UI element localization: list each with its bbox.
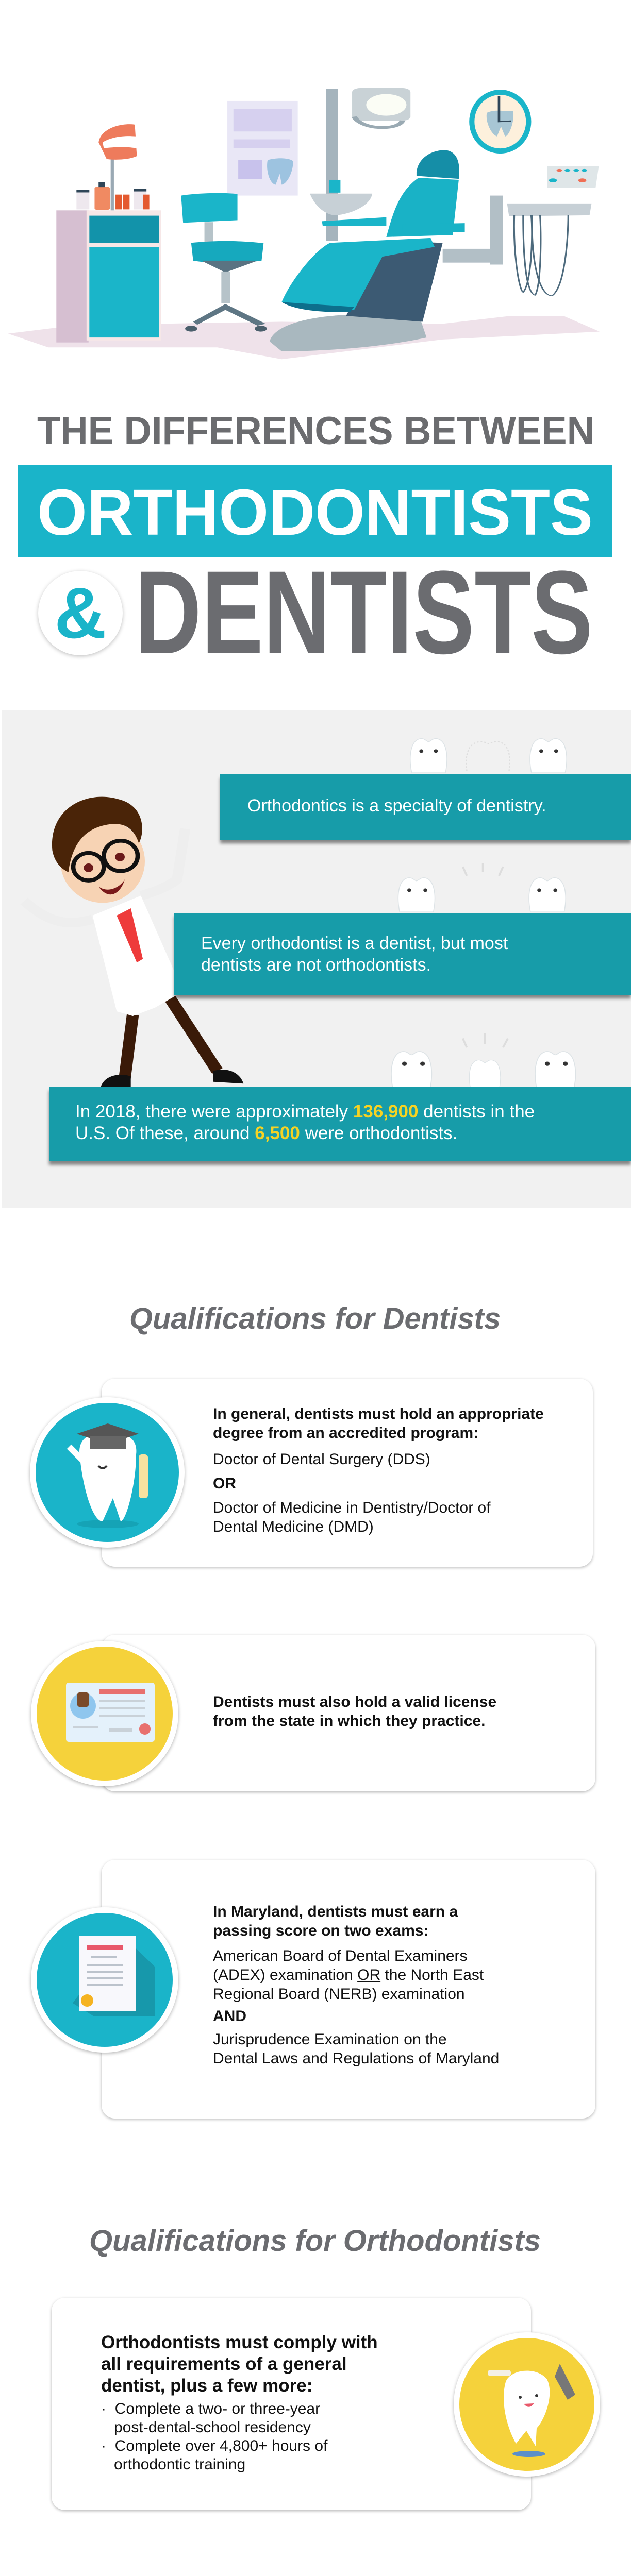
text: maryland exams: (ADEX) examination OR the North East bbox=[213, 1967, 484, 1984]
card: license bbox=[102, 1635, 595, 1791]
stat box: specialty: Orthodontics is a specialty of dentistry. bbox=[247, 796, 546, 816]
text: orthodontist requirements: all requirements of a general bbox=[101, 2354, 347, 2374]
text: orthodontist requirements: dentist, plus a few more: bbox=[101, 2376, 312, 2396]
text: maryland exams: In Maryland, dentists must earn a bbox=[213, 1903, 458, 1920]
title banner: orthodontists: ORTHODONTISTS bbox=[37, 476, 593, 549]
text: degree requirements: In general, dentists must hold an appropriate bbox=[213, 1405, 544, 1422]
text: orthodontist requirements: · Complete a two- or three-year bbox=[101, 2400, 320, 2417]
stat box: every orthodontist: dentists are not orthodontists. bbox=[201, 955, 431, 975]
heading: qualifications for orthodontists: Qualifications for Orthodontists bbox=[89, 2224, 541, 2258]
text: maryland exams: AND bbox=[213, 2008, 246, 2025]
text: degree requirements: Doctor of Dental Surgery (DDS) bbox=[213, 1451, 430, 1468]
stat box: every orthodontist bbox=[174, 913, 631, 995]
text: orthodontist requirements: post-dental-school residency bbox=[114, 2419, 311, 2436]
text: license bbox=[213, 1693, 496, 1730]
text: degree requirements: Doctor of Medicine in Dentistry/Doctor of bbox=[213, 1499, 491, 1516]
icon: graduate tooth bbox=[30, 1397, 185, 1548]
illustration: dental office bbox=[8, 88, 599, 360]
text: license: Dentists must also hold a valid license bbox=[213, 1693, 496, 1710]
icon: license card bbox=[31, 1641, 178, 1786]
text: maryland exams: passing score on two exams: bbox=[213, 1922, 428, 1939]
stat box: every orthodontist: Every orthodontist is a dentist, but most bbox=[201, 934, 508, 953]
text: maryland exams: Regional Board (NERB) examination bbox=[213, 1986, 465, 2003]
icon: certificate bbox=[31, 1907, 178, 2053]
text: degree requirements: degree from an accredited program: bbox=[213, 1425, 478, 1442]
text: orthodontist requirements bbox=[101, 2332, 378, 2473]
text: maryland exams: Dental Laws and Regulations of Maryland bbox=[213, 2050, 499, 2067]
text: maryland exams: Jurisprudence Examination on the bbox=[213, 2031, 447, 2048]
icon: jumping graduate tooth bbox=[454, 2332, 600, 2477]
text: orthodontist requirements: · Complete over 4,800+ hours of bbox=[101, 2437, 327, 2454]
card: degree bbox=[102, 1379, 593, 1567]
stat box: 2018 numbers: U.S. Of these, around 6,500 were orthodontists. bbox=[75, 1123, 457, 1143]
text: degree requirements: Dental Medicine (DMD) bbox=[213, 1518, 374, 1535]
text: degree requirements bbox=[213, 1405, 544, 1535]
card: orthodontist requirements bbox=[52, 2298, 531, 2510]
heading: qualifications for dentists: Qualifications for Dentists bbox=[129, 1302, 501, 1335]
stat box: 2018 numbers bbox=[49, 1087, 631, 1161]
text: license: from the state in which they practice. bbox=[213, 1713, 485, 1730]
illustration: waving doctor and peeking teeth bbox=[52, 738, 576, 1087]
text: degree requirements: OR bbox=[213, 1475, 236, 1492]
text: orthodontist requirements: Orthodontists must comply with bbox=[101, 2332, 378, 2352]
stat box: specialty bbox=[220, 774, 631, 840]
text: orthodontist requirements: orthodontic training bbox=[114, 2456, 245, 2473]
text: maryland exams: American Board of Dental Examiners bbox=[213, 1947, 468, 1964]
card: maryland exams bbox=[102, 1860, 595, 2119]
icon: ampersand circle: & bbox=[54, 572, 107, 653]
text: maryland exams bbox=[213, 1903, 499, 2067]
icon: ampersand circle bbox=[38, 571, 123, 655]
panel: key facts bbox=[2, 710, 631, 1208]
stat box: 2018 numbers: In 2018, there were approximately 136,900 dentists in the bbox=[75, 1101, 535, 1122]
